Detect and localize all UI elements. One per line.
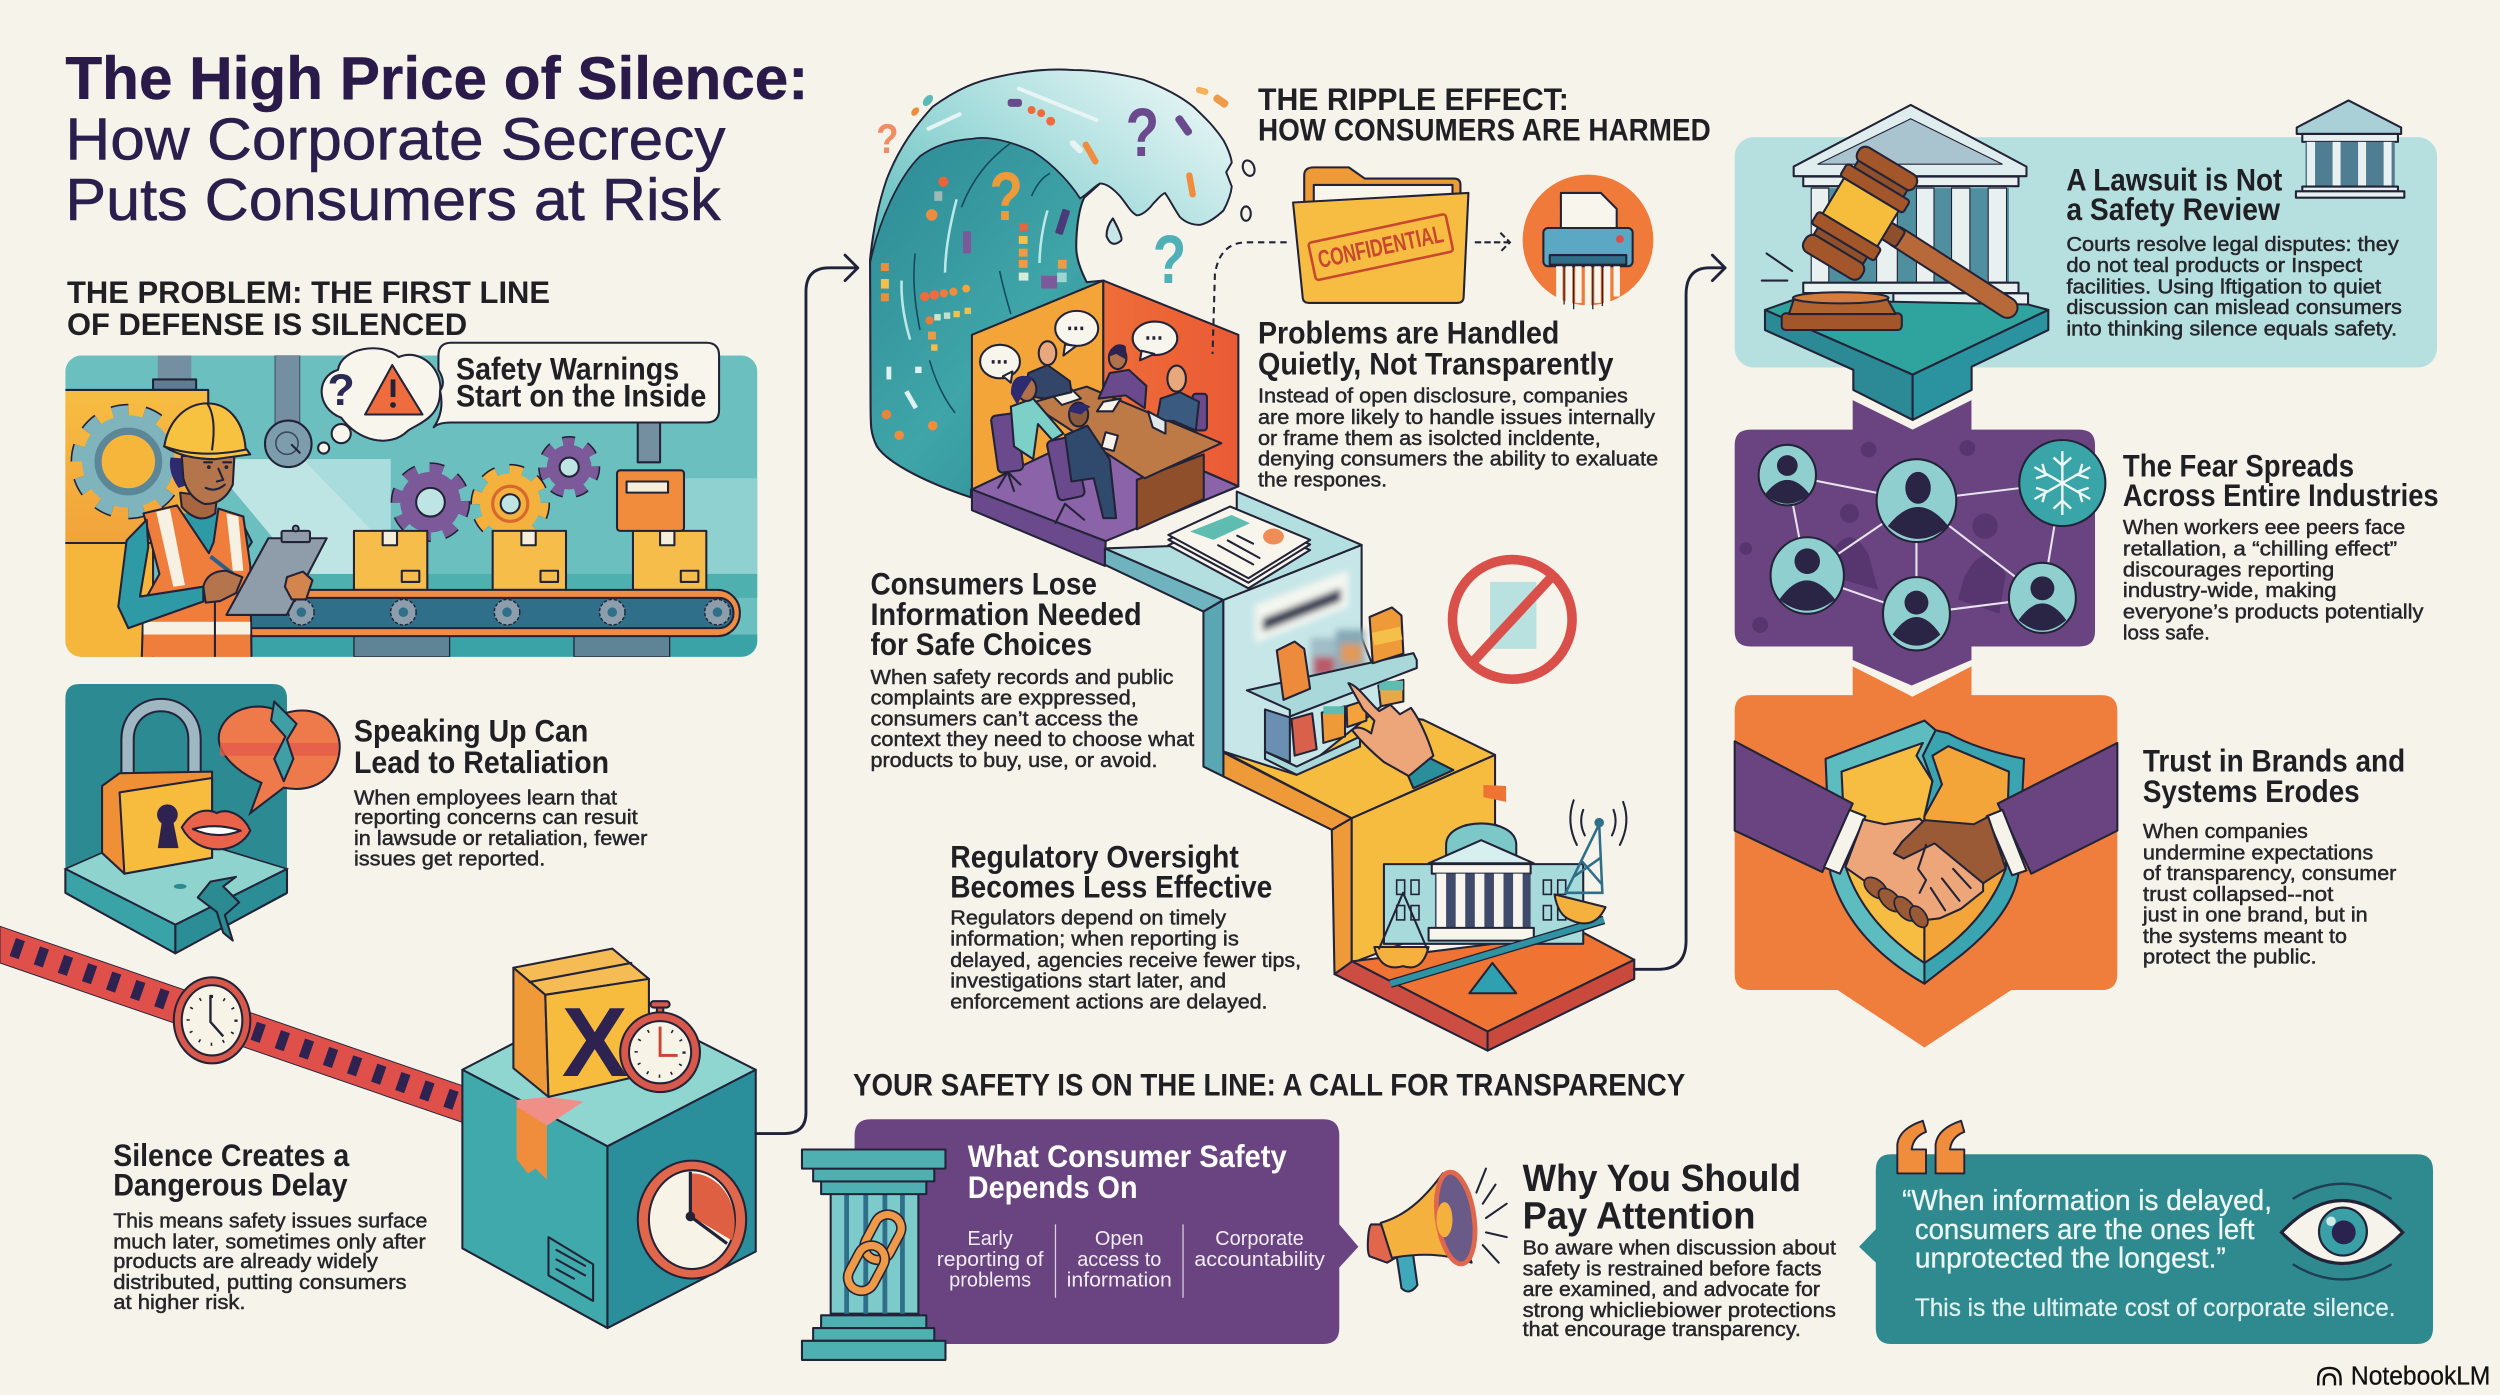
panel: what consumer safety depends on bbox=[855, 1119, 1358, 1344]
regulator base bbox=[1335, 785, 1634, 1051]
text: silence creates delay: products are already widely bbox=[113, 1250, 379, 1273]
column: open access bbox=[1067, 1228, 1172, 1292]
sleeve bbox=[118, 520, 203, 628]
text: fear spreads: retallation, a “chilling effect” bbox=[2123, 538, 2397, 561]
text: trust erodes: the systems meant to bbox=[2143, 925, 2347, 948]
speech bubbles bbox=[980, 311, 1177, 383]
broken speech bubble bbox=[219, 701, 340, 813]
broken pillar icon bbox=[802, 1149, 945, 1360]
store shelf block bbox=[1105, 492, 1387, 776]
text: consumers lose information: for Safe Choices bbox=[871, 626, 1092, 662]
text: why pay attention: are examined, and advocate for bbox=[1523, 1278, 1820, 1301]
panel: eroding trust bbox=[1735, 666, 2117, 1047]
cracked shield bbox=[1826, 721, 2024, 984]
text: fear spreads: The Fear Spreads bbox=[2123, 448, 2354, 484]
column: open access: access to bbox=[1077, 1249, 1161, 1271]
text: regulatory oversight: information; when reporting is bbox=[950, 927, 1239, 950]
callout: safety warnings bbox=[434, 343, 719, 427]
text: why pay attention: strong whicliebiower protections bbox=[1523, 1299, 1836, 1322]
text: silence creates delay: much later, sometimes only after bbox=[113, 1230, 426, 1253]
sound block bbox=[1782, 292, 1902, 330]
quote text: unprotected the longest.” bbox=[1915, 1242, 2226, 1274]
clock on box bbox=[638, 1161, 746, 1279]
ripple effect heading bbox=[1258, 81, 1711, 147]
text: trust erodes: protect the public. bbox=[2143, 946, 2317, 969]
title: Puts Consumers at Risk bbox=[65, 167, 721, 233]
text: regulatory oversight: delayed, agencies receive fewer tips, bbox=[950, 949, 1301, 972]
text: fear spreads: loss safe. bbox=[2123, 621, 2210, 644]
panel: lock and retaliation illustration bbox=[65, 684, 340, 953]
teal plinth bbox=[1765, 300, 2048, 420]
thought bubble: ? bbox=[328, 366, 355, 415]
wave illustration: ? bbox=[1153, 221, 1186, 298]
text: handled quietly: Instead of open disclosure, companies bbox=[1258, 385, 1628, 408]
text: consumers lose information: consumers can’t access the bbox=[871, 707, 1138, 730]
text: silence creates delay: Dangerous Delay bbox=[113, 1167, 348, 1203]
quote marks bbox=[1897, 1121, 1964, 1173]
large gear bbox=[81, 414, 176, 509]
column: early reporting bbox=[937, 1228, 1044, 1292]
ripple effect heading: HOW CONSUMERS ARE HARMED bbox=[1258, 111, 1711, 147]
text: why pay attention: that encourage transparency. bbox=[1523, 1318, 1801, 1341]
hands and pen bbox=[210, 556, 233, 574]
network nodes bbox=[1759, 445, 2076, 650]
floating data marks bbox=[881, 86, 1196, 440]
arrow: package to wave bbox=[756, 255, 858, 1134]
column: accountability bbox=[1194, 1228, 1325, 1271]
text: handled quietly: denying consumers the ability to exaluate bbox=[1258, 448, 1658, 471]
delayed package cube bbox=[462, 949, 756, 1328]
delayed package cube: X bbox=[562, 987, 628, 1097]
text: handled quietly: Quietly, Not Transparently bbox=[1258, 346, 1614, 382]
text: speaking up: Speaking Up Can bbox=[354, 712, 588, 748]
chain links bbox=[843, 1210, 906, 1296]
handshake bbox=[1845, 817, 2006, 931]
small box with X bbox=[513, 949, 649, 995]
text: handled quietly: the respones. bbox=[1258, 468, 1387, 491]
cracked slab bbox=[65, 829, 287, 953]
panel: lawsuit bbox=[1735, 100, 2437, 420]
quote text: “When information is delayed, bbox=[1902, 1185, 2272, 1217]
text: consumers lose information: complaints are exppressed, bbox=[871, 687, 1137, 710]
closing line: This is the ultimate cost of corporate silence. bbox=[1915, 1295, 2396, 1322]
gavel bbox=[1762, 142, 2007, 308]
panel: factory illustration bbox=[57, 343, 757, 664]
right pipe bbox=[638, 418, 660, 462]
clipboard bbox=[226, 538, 327, 615]
lips bbox=[182, 811, 250, 849]
column: early reporting: Early bbox=[967, 1228, 1013, 1250]
text: why pay attention: Why You Should bbox=[1523, 1157, 1801, 1200]
question marks and droplets: ? bbox=[876, 115, 898, 162]
flag bbox=[1483, 785, 1506, 802]
wave illustration: ? bbox=[1126, 94, 1159, 171]
radio tower bbox=[1566, 800, 1626, 893]
text: trust erodes: undermine expectations bbox=[2143, 841, 2373, 864]
shredder icon bbox=[1523, 175, 1653, 312]
vest bbox=[142, 505, 252, 663]
heading: the problem: THE PROBLEM: THE FIRST LINE bbox=[67, 274, 550, 310]
text: speaking up: reporting concerns can resuit bbox=[354, 806, 638, 829]
text: fear spreads: Across Entire Industries bbox=[2123, 477, 2439, 513]
NotebookLM logo: NotebookLM bbox=[2351, 1361, 2490, 1391]
wave illustration bbox=[870, 70, 1257, 497]
column: open access: Open bbox=[1095, 1228, 1144, 1250]
faded background people bbox=[1739, 440, 2006, 633]
megaphone icon bbox=[1368, 1169, 1507, 1292]
callout: safety warnings: Start on the Inside bbox=[456, 379, 706, 414]
text: lawsuit: do not teal products or Inspect bbox=[2066, 254, 2362, 277]
no symbol bbox=[1452, 560, 1572, 679]
courthouse bbox=[1794, 105, 2028, 306]
text: trust erodes: Trust in Brands and bbox=[2143, 743, 2405, 779]
conveyor belt bbox=[223, 590, 740, 636]
neck and head bbox=[180, 493, 217, 518]
panel: what consumer safety depends on: Depends On bbox=[968, 1169, 1138, 1205]
text: trust erodes bbox=[2142, 743, 2405, 969]
text: consumers lose information bbox=[871, 566, 1194, 772]
blurred sign bbox=[1255, 570, 1348, 643]
text: trust erodes: When companies bbox=[2143, 820, 2308, 843]
panel: quote callout bbox=[1859, 1121, 2433, 1344]
text: lawsuit: facilities. Using lftigation to quiet bbox=[2066, 275, 2381, 298]
stopwatch bbox=[651, 1001, 670, 1008]
small courthouse icon bbox=[2296, 100, 2404, 198]
text: speaking up: issues get reported. bbox=[354, 848, 545, 871]
capitol building bbox=[1384, 823, 1583, 944]
product shelves and hand bbox=[1247, 607, 1453, 788]
tape bbox=[517, 1097, 584, 1126]
text: fear spreads: When workers eee peers face bbox=[2123, 516, 2405, 539]
text: trust erodes: just in one brand, but in bbox=[2142, 903, 2368, 926]
text: handled quietly: or frame them as isolcted incldente, bbox=[1258, 427, 1601, 450]
text: regulatory oversight: enforcement actions are delayed. bbox=[950, 990, 1268, 1013]
report stack bbox=[1168, 507, 1310, 588]
text: regulatory oversight bbox=[950, 838, 1301, 1013]
text: silence creates delay bbox=[113, 1137, 427, 1314]
balance scale bbox=[1374, 893, 1606, 993]
red delay ribbon bbox=[0, 926, 462, 1122]
text: lawsuit: A Lawsuit is Not bbox=[2066, 162, 2283, 198]
thought bubble bbox=[318, 348, 440, 454]
text: lawsuit: a Safety Review bbox=[2066, 191, 2280, 227]
dashed connector to folder bbox=[1213, 242, 1287, 354]
text: handled quietly: are more likely to handle issues internally bbox=[1258, 406, 1656, 429]
purple sleeves bbox=[1735, 741, 2117, 875]
column: open access: information bbox=[1067, 1270, 1172, 1292]
text: lawsuit: into thinking silence equals safety. bbox=[2066, 318, 2397, 341]
text: speaking up: Lead to Retaliation bbox=[354, 744, 609, 780]
torso and shirt bbox=[184, 513, 217, 551]
boxes on conveyor bbox=[354, 470, 706, 590]
text: silence creates delay: Silence Creates a bbox=[113, 1137, 349, 1173]
column: accountability: Corporate bbox=[1215, 1228, 1304, 1250]
text: silence creates delay: This means safety issues surface bbox=[113, 1210, 427, 1233]
network links bbox=[1787, 475, 2062, 614]
eye icon bbox=[2282, 1184, 2403, 1279]
heading: call for transparency: YOUR SAFETY IS ON THE LINE: A CALL FOR TRANSPARENCY bbox=[853, 1066, 1685, 1102]
ceiling pipe and valve bbox=[265, 356, 312, 467]
text: silence creates delay: at higher risk. bbox=[113, 1291, 246, 1314]
text: silence creates delay: distributed, putting consumers bbox=[113, 1271, 407, 1294]
text: why pay attention bbox=[1523, 1157, 1836, 1341]
confidential folder: CONFIDENTIAL bbox=[1316, 221, 1446, 274]
hard hat bbox=[164, 403, 250, 459]
dashed arrow to shredder bbox=[1475, 233, 1510, 252]
text: consumers lose information: Consumers Lose bbox=[871, 566, 1097, 602]
title: How Corporate Secrecy bbox=[65, 106, 726, 172]
yellow stair block bbox=[1223, 709, 1495, 974]
seated people bbox=[991, 341, 1207, 523]
arrow: regulator to lawsuit bbox=[1634, 255, 1725, 969]
quote text: consumers are the ones left bbox=[1915, 1214, 2254, 1246]
text: lawsuit bbox=[2066, 162, 2402, 341]
text: speaking up bbox=[354, 712, 647, 871]
text: lawsuit: Courts resolve legal disputes: they bbox=[2066, 233, 2399, 256]
column: accountability: accountability bbox=[1194, 1249, 1325, 1271]
snowflake badge bbox=[2019, 440, 2105, 526]
panel: what consumer safety depends on: What Consumer Safety bbox=[968, 1138, 1287, 1174]
text: lawsuit: discussion can mislead consumers bbox=[2066, 296, 2402, 319]
text: why pay attention: safety is restrained before facts bbox=[1523, 1257, 1822, 1280]
clock on ribbon bbox=[174, 977, 250, 1063]
wave inner lines bbox=[914, 143, 1050, 413]
text: handled quietly: Problems are Handled bbox=[1258, 315, 1559, 351]
text: handled quietly bbox=[1258, 315, 1658, 491]
text: consumers lose information: context they need to choose what bbox=[871, 728, 1194, 751]
text: fear spreads: discourages reporting bbox=[2123, 558, 2334, 581]
meeting table bbox=[1030, 386, 1221, 529]
text: consumers lose information: products to buy, use, or avoid. bbox=[871, 749, 1158, 772]
worker bbox=[118, 403, 327, 663]
text: fear spreads: everyone’s products potentially bbox=[2123, 601, 2424, 624]
column: early reporting: reporting of bbox=[937, 1249, 1044, 1271]
text: why pay attention: Pay Attention bbox=[1523, 1194, 1755, 1237]
column: early reporting: problems bbox=[949, 1270, 1031, 1292]
meeting room bbox=[972, 281, 1238, 566]
quote text bbox=[1902, 1185, 2272, 1274]
text: speaking up: in lawsude or retaliation, fewer bbox=[354, 827, 647, 850]
text: fear spreads bbox=[2123, 448, 2439, 644]
text: regulatory oversight: Regulatory Oversight bbox=[950, 838, 1239, 874]
confidential folder bbox=[1293, 167, 1468, 303]
title: The High Price of Silence: bbox=[65, 44, 808, 112]
text: trust erodes: trust collapsed--not bbox=[2143, 883, 2334, 906]
shipping label bbox=[548, 1237, 593, 1301]
text: regulatory oversight: investigations start later, and bbox=[950, 970, 1226, 993]
text: speaking up: When employees learn that bbox=[354, 786, 617, 809]
text: why pay attention: Bo aware when discussion about bbox=[1523, 1237, 1836, 1260]
text: consumers lose information: When safety records and public bbox=[871, 666, 1173, 689]
gears bbox=[399, 470, 462, 534]
panel: spreading fear network bbox=[1735, 400, 2105, 686]
heading: the problem bbox=[67, 274, 550, 342]
callout: safety warnings: Safety Warnings bbox=[456, 351, 679, 386]
padlock bbox=[102, 705, 212, 874]
text: consumers lose information: Information Needed bbox=[871, 596, 1142, 632]
text: regulatory oversight: Becomes Less Effective bbox=[950, 869, 1272, 905]
wave illustration: ? bbox=[989, 158, 1023, 235]
heading: the problem: OF DEFENSE IS SILENCED bbox=[67, 306, 467, 342]
text: regulatory oversight: Regulators depend on timely bbox=[950, 907, 1227, 930]
text: trust erodes: Systems Erodes bbox=[2143, 773, 2360, 809]
text: trust erodes: of transparency, consumer bbox=[2143, 862, 2396, 885]
ripple effect heading: THE RIPPLE EFFECT: bbox=[1258, 81, 1569, 117]
text: fear spreads: industry-wide, making bbox=[2123, 579, 2337, 602]
title bbox=[65, 44, 808, 233]
machine block bbox=[57, 356, 208, 664]
